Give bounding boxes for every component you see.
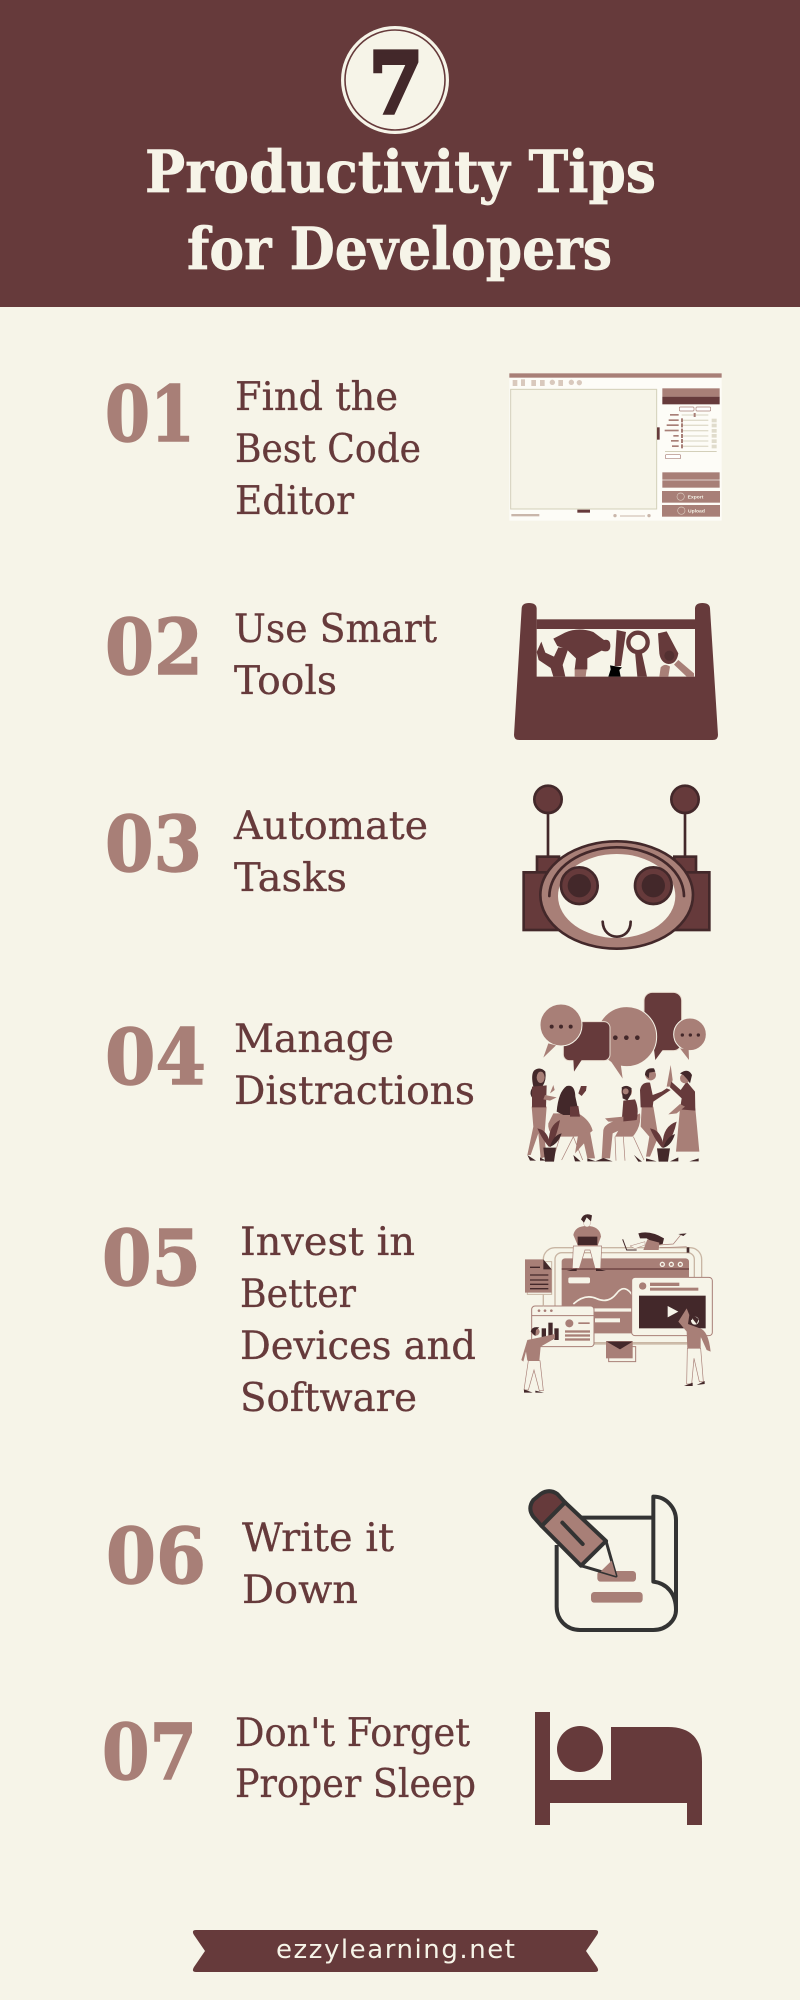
footer url: ezzylearning.net [276, 1935, 515, 1965]
number 03: 03 [105, 800, 202, 890]
heading 02: Tools [234, 659, 337, 704]
number 05: 05 [102, 1214, 201, 1304]
icon: number 7 badge: 7 [369, 34, 423, 133]
tip 03: automate tasks [105, 786, 709, 949]
icon: bed [535, 1712, 702, 1825]
title [145, 138, 656, 283]
figure: seated man [595, 1086, 644, 1161]
number 06: 06 [106, 1512, 206, 1602]
number 01: 01 [105, 370, 195, 460]
header banner [0, 0, 800, 307]
number 07: 07 [102, 1708, 197, 1798]
number 04: 04 [105, 1013, 206, 1103]
tip 06: write it down [106, 1491, 676, 1630]
heading 07: Proper Sleep [235, 1762, 476, 1807]
heading 03: Tasks [234, 856, 347, 901]
heading 07: Don't Forget [235, 1711, 470, 1756]
figure: standing woman right [668, 1071, 699, 1161]
figure: seated woman [548, 1086, 596, 1161]
document [525, 1259, 552, 1307]
tip 04: manage distractions [105, 992, 706, 1162]
tip 05: invest in better devices and software [102, 1214, 712, 1421]
heading 01 [235, 375, 421, 524]
heading 05 [240, 1220, 476, 1421]
heading 03: Automate [233, 804, 428, 849]
figure: person at chart window [521, 1327, 555, 1393]
icon: code editor screenshot [509, 373, 722, 521]
heading 04: Manage [234, 1017, 394, 1062]
heading 03 [233, 804, 428, 901]
heading 01: Editor [235, 479, 354, 524]
icon: code editor screenshot: Export [688, 495, 704, 501]
heading 02 [234, 607, 437, 704]
tip 01: find the best code editor [105, 370, 722, 524]
heading 06 [242, 1516, 394, 1613]
icon: code editor screenshot: Upload [688, 508, 705, 514]
heading 05: Invest in [240, 1220, 415, 1265]
tip 02: use smart tools [105, 603, 718, 740]
icon: people working on devices [521, 1214, 712, 1393]
footer ribbon [193, 1930, 598, 1972]
heading 01: Find the [235, 375, 398, 420]
heading 04 [234, 1017, 475, 1114]
envelope [606, 1341, 636, 1362]
heading 06: Write it [242, 1516, 394, 1561]
figure: standing man [634, 1065, 673, 1162]
figure: woman lying with laptop [623, 1232, 689, 1253]
icon: people talking with speech bubbles [527, 992, 706, 1162]
heading 05: Devices and [240, 1324, 476, 1369]
figure: person sitting on monitor [567, 1214, 606, 1271]
heading 06: Down [242, 1568, 358, 1613]
heading 02: Use Smart [234, 607, 437, 652]
figure: woman standing left [527, 1069, 557, 1161]
heading 07 [235, 1711, 476, 1807]
icon: robot head [524, 786, 709, 949]
heading 05: Better [240, 1272, 356, 1317]
title: for Developers [187, 215, 612, 283]
figure: person at video window [678, 1308, 711, 1386]
tip 07: don't forget proper sleep [102, 1708, 702, 1825]
icon: right potted plant [650, 1122, 677, 1162]
heading 05: Software [240, 1376, 417, 1421]
icon: left potted plant [537, 1120, 562, 1162]
chart window [532, 1306, 594, 1347]
heading 01: Best Code [235, 427, 421, 472]
number 02: 02 [105, 603, 203, 693]
heading 04: Distractions [234, 1069, 475, 1114]
icon: number 7 badge [341, 26, 449, 134]
icon: pencil writing on paper scroll [530, 1491, 676, 1630]
title: Productivity Tips [145, 138, 656, 206]
icon: toolbox [514, 603, 718, 740]
video window [632, 1277, 712, 1336]
